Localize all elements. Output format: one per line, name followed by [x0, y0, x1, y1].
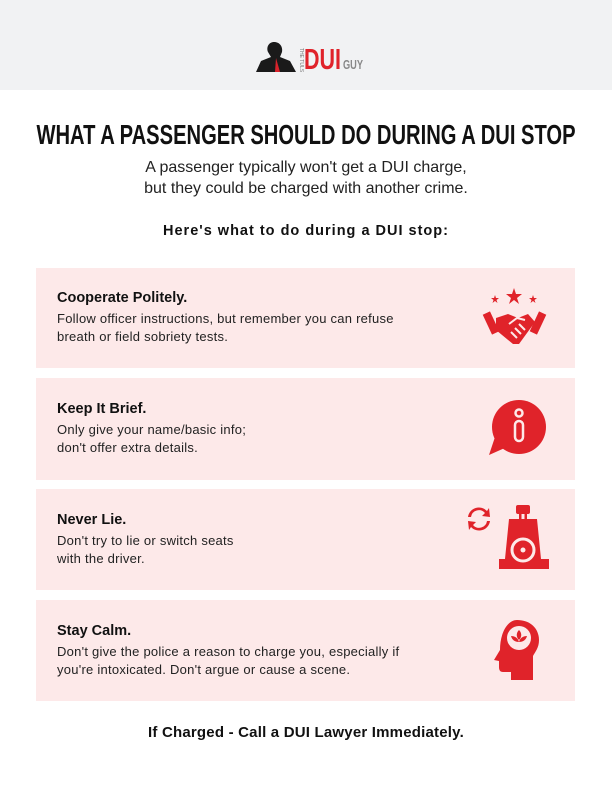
- card: never lie: Don't try to lie or switch seats: [57, 533, 234, 548]
- footer callout: If Charged - Call a DUI Lawyer Immediately.: [148, 724, 464, 741]
- card: keep it brief: don't offer extra details.: [57, 440, 198, 455]
- subtitle: but they could be charged with another crime.: [144, 180, 468, 197]
- card: cooperate politely: breath or field sobriety tests.: [57, 329, 228, 344]
- card: stay calm: [36, 600, 575, 701]
- card: stay calm: Stay Calm.: [57, 623, 131, 639]
- card: stay calm: Don't give the police a reason to charge you, especially if: [57, 644, 399, 659]
- card: stay calm: you're intoxicated. Don't argue or cause a scene.: [57, 662, 350, 677]
- card: never lie: Never Lie.: [57, 512, 126, 528]
- card: never lie: [36, 489, 575, 590]
- card: keep it brief: [36, 378, 575, 480]
- card: keep it brief: Only give your name/basic info;: [57, 422, 246, 437]
- subtitle: [144, 159, 468, 197]
- card: cooperate politely: Follow officer instructions, but remember you can refuse: [57, 311, 394, 326]
- card: never lie: with the driver.: [57, 551, 145, 566]
- title: WHAT A PASSENGER SHOULD DO DURING A DUI STOP: [36, 119, 576, 150]
- logo: [256, 42, 363, 72]
- header band: [0, 0, 612, 90]
- section heading: Here's what to do during a DUI stop:: [163, 223, 449, 239]
- icon: calm head: [494, 620, 539, 680]
- icon: handshake: [482, 288, 546, 344]
- card: cooperate politely: Cooperate Politely.: [57, 290, 187, 306]
- card: cooperate politely: [36, 268, 575, 368]
- card: keep it brief: Keep It Brief.: [57, 401, 146, 417]
- icon: info speech bubble: [489, 400, 546, 455]
- icon: seat swap: [468, 505, 549, 569]
- subtitle: A passenger typically won't get a DUI charge,: [145, 159, 467, 176]
